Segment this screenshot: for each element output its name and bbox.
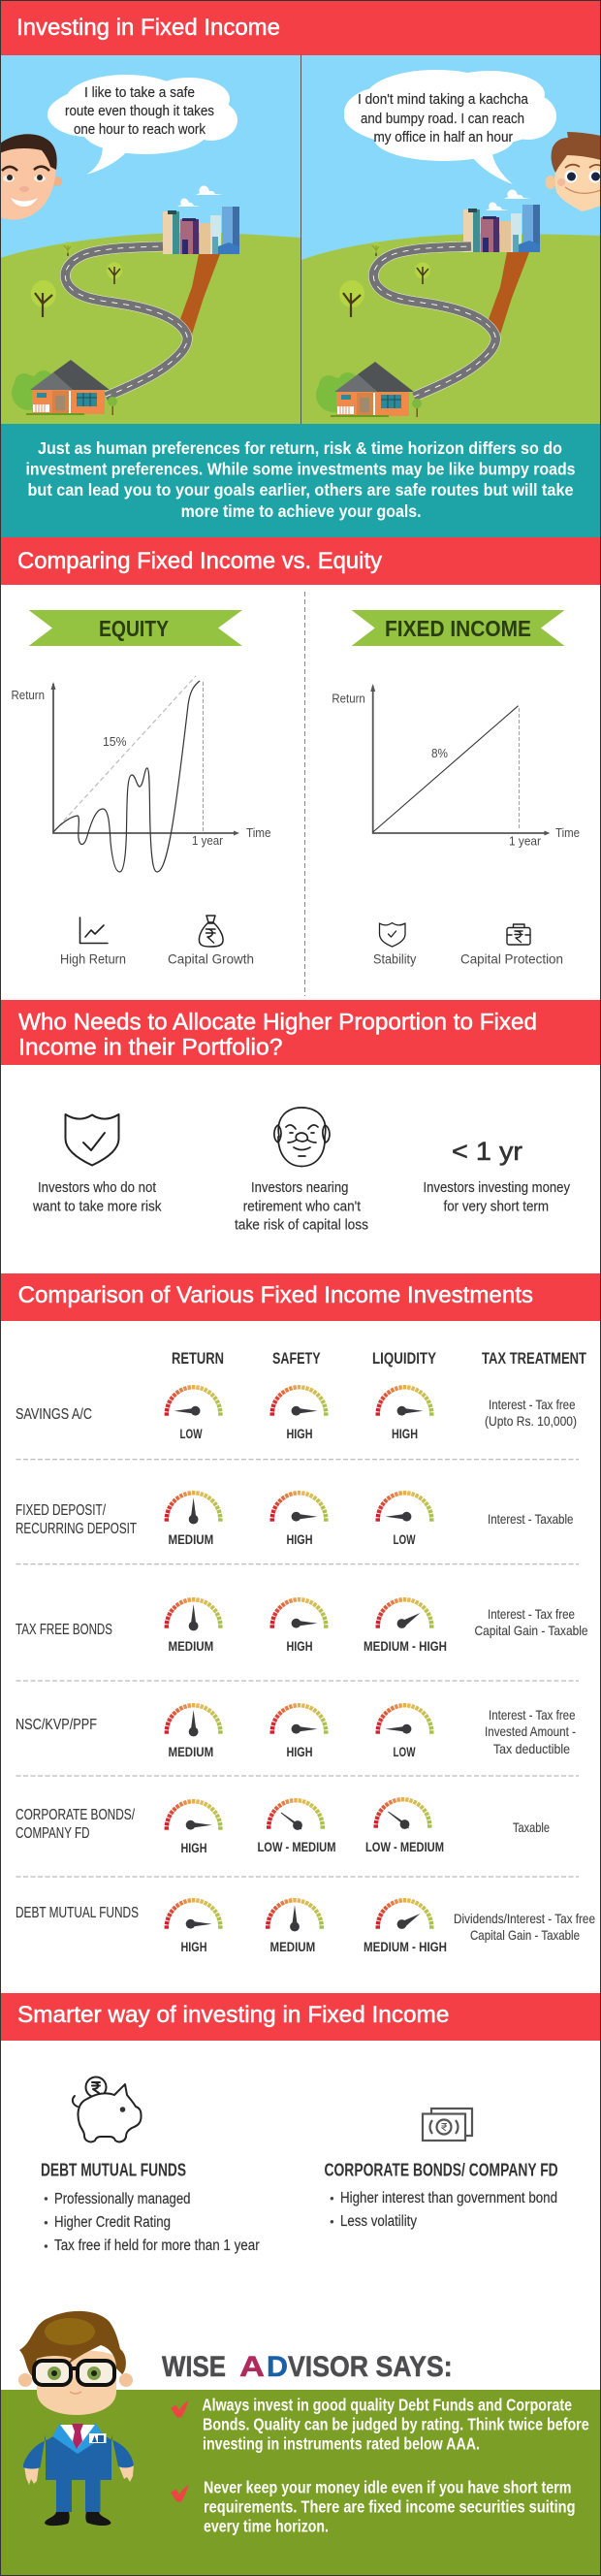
line chart: fixed income returns: 8% [431, 746, 448, 760]
panel: bumpy route scene [301, 55, 601, 424]
row: fixed deposit: Interest - Taxable [488, 1511, 574, 1527]
heading: Who Needs to Allocate: Who Needs to Allocate Higher Proportion to Fixed [18, 1009, 537, 1035]
row: nsc/kvp/ppf: Invested Amount - [485, 1723, 576, 1739]
row: fixed deposit: RECURRING DEPOSIT [16, 1521, 137, 1537]
panel: debt mutual funds: DEBT MUTUAL FUNDS [41, 2160, 186, 2179]
heading: wise advisor says [162, 2351, 453, 2383]
road [65, 246, 187, 397]
heading: Comparing Fixed Income vs. Equity: Comparing Fixed Income vs. Equity [17, 548, 382, 574]
panel: corporate bonds: Less volatility [340, 2213, 417, 2230]
speech bubble: one hour to reach work [74, 122, 206, 138]
row: savings a/c: LOW [180, 1427, 203, 1441]
text: investors nearing retirement: take risk of capital loss [235, 1217, 368, 1234]
row: nsc/kvp/ppf: Interest - Tax free [489, 1707, 576, 1723]
row: debt mutual funds: Capital Gain - Taxable [470, 1927, 580, 1943]
speech bubble: my office in half an hour [374, 130, 513, 145]
text: investors no risk [32, 1179, 162, 1214]
row: savings a/c: Interest - Tax free [489, 1397, 576, 1412]
speech bubble: route even though it takes [65, 104, 214, 119]
label: capital protection: Capital Protection [460, 951, 563, 967]
row: corporate bonds: Taxable [513, 1819, 550, 1835]
panel: fixed income [332, 610, 580, 967]
line chart: equity returns [12, 676, 271, 872]
text: investors no risk: Investors who do not [38, 1179, 157, 1196]
row: fixed deposit: HIGH [287, 1532, 312, 1547]
heading: wise advisor says: D [267, 2351, 288, 2383]
teal statement band: Just as human preferences for return, risk & time horizon differs so do [38, 438, 562, 458]
row: tax free bonds: MEDIUM [169, 1639, 213, 1654]
panel: equity [12, 610, 271, 967]
speech bubble [47, 75, 237, 175]
row: corporate bonds: COMPANY FD [16, 1825, 89, 1842]
panel: debt mutual funds: Higher Credit Rating [54, 2214, 171, 2231]
line chart: equity returns: 1 year [192, 833, 224, 848]
text: investors nearing retirement: retirement who can't [243, 1198, 362, 1214]
panel: corporate bonds [324, 2160, 558, 2230]
text: investors nearing retirement: Investors nearing [251, 1179, 348, 1196]
banner: fixed income [352, 610, 564, 646]
row: nsc/kvp/ppf: LOW [394, 1745, 416, 1759]
teal statement band: more time to achieve your goals. [181, 501, 422, 521]
icon: young man's face [545, 132, 601, 211]
row: tax free bonds: MEDIUM - HIGH [364, 1639, 447, 1654]
tip 2: every time horizon. [204, 2517, 329, 2536]
banner: equity: EQUITY [99, 616, 169, 641]
text: investors short term [423, 1179, 570, 1214]
section: wise advisor says [0, 2311, 601, 2576]
row: fixed deposit [16, 1491, 574, 1547]
kachcha path [489, 252, 529, 338]
speech bubble: I like to take a safe [84, 85, 195, 101]
teal statement band: but can lead you to your goals earlier, others are safe routes but will take [27, 480, 574, 499]
row: nsc/kvp/ppf: HIGH [287, 1745, 312, 1759]
row: corporate bonds: HIGH [180, 1841, 207, 1855]
heading: Investing in Fixed Income: Investing in Fixed Income [16, 15, 280, 41]
section: smarter way [0, 1993, 601, 2254]
icon: high return [79, 918, 108, 943]
heading: Who Needs to Allocate: Income in their Portfolio? [18, 1034, 282, 1060]
icon: advisor character [18, 2311, 134, 2526]
row: tax free bonds: Interest - Tax free [488, 1606, 575, 1622]
row: debt mutual funds: MEDIUM - HIGH [364, 1940, 447, 1954]
label: stability: Stability [373, 951, 416, 967]
text: investors short term: Investors investing money [423, 1179, 570, 1196]
row: fixed deposit: FIXED DEPOSIT/ [16, 1502, 107, 1519]
line chart: equity returns: Time [246, 825, 271, 840]
heading: Comparison of Various Fixed Income Investments: Comparison of Various Fixed Income Investments [18, 1282, 533, 1308]
kachcha path [180, 254, 220, 338]
row: debt mutual funds: MEDIUM [269, 1940, 315, 1954]
line chart: fixed income returns [332, 684, 580, 849]
icon: capital protection briefcase [507, 924, 530, 945]
icon: shield with check [66, 1114, 118, 1166]
road [373, 246, 495, 397]
speech bubble [344, 70, 556, 184]
icon: small clouds [486, 190, 531, 210]
line chart: fixed income returns: Time [555, 825, 580, 840]
banner: fixed income: FIXED INCOME [385, 616, 531, 641]
table header: RETURN [172, 1350, 224, 1368]
line chart: fixed income returns: 1 year [509, 834, 542, 849]
heading: wise advisor says: WISE [162, 2351, 226, 2383]
panel: debt mutual funds: Professionally managed [54, 2191, 190, 2207]
trees [339, 242, 430, 317]
icon: house [12, 360, 117, 415]
heading: Comparing Fixed Income vs. Equity [0, 537, 601, 585]
label: capital growth: Capital Growth [168, 951, 254, 967]
icon: piggy bank [73, 2077, 142, 2141]
banner: equity [29, 610, 242, 646]
heading: Investing in Fixed Income [0, 0, 601, 55]
heading: Who Needs to Allocate [0, 1000, 601, 1065]
row: nsc/kvp/ppf: Tax deductible [493, 1741, 570, 1756]
heading: Smarter way of investing in Fixed Income [0, 1993, 601, 2041]
row: savings a/c: SAVINGS A/C [16, 1406, 92, 1423]
row: savings a/c: HIGH [392, 1427, 418, 1441]
icon: stability shield [380, 923, 405, 947]
teal statement band [0, 424, 601, 537]
section: comparing fixed income vs equity [0, 537, 601, 996]
row: corporate bonds [16, 1797, 550, 1855]
icon: city buildings [463, 205, 540, 252]
table header: SAFETY [272, 1350, 321, 1368]
tip 1 [171, 2396, 589, 2454]
row: debt mutual funds: HIGH [180, 1940, 207, 1954]
panel: corporate bonds: Higher interest than government bond [340, 2190, 557, 2206]
green band [0, 2390, 601, 2576]
heading: Smarter way of investing in Fixed Income: Smarter way of investing in Fixed Income [17, 2002, 449, 2028]
line chart: fixed income returns: Return [332, 692, 365, 706]
row: savings a/c: HIGH [287, 1427, 312, 1441]
speech bubble: I don't mind taking a kachcha [358, 92, 529, 108]
heading: wise advisor says: A [239, 2351, 265, 2383]
section: who needs fixed income [0, 1000, 601, 1234]
tip 2 [171, 2478, 576, 2536]
line chart: equity returns: Return [12, 688, 45, 702]
row: fixed deposit: MEDIUM [169, 1532, 213, 1547]
heading: wise advisor says: VISOR SAYS: [288, 2351, 453, 2383]
heading: Comparison of Various Fixed Income Investments [0, 1273, 601, 1321]
icon: red check [171, 2400, 188, 2417]
row: debt mutual funds: DEBT MUTUAL FUNDS [16, 1905, 139, 1921]
line chart: equity returns: 15% [103, 734, 127, 749]
panel: debt mutual funds [41, 2160, 260, 2254]
text: less than 1 yr: < 1 yr [452, 1137, 522, 1166]
tip 1: investing in instruments rated below AAA. [203, 2434, 480, 2454]
row: corporate bonds: CORPORATE BONDS/ [16, 1807, 136, 1823]
table header [172, 1350, 586, 1368]
icon: old man face [274, 1108, 330, 1166]
section: investing scenario [0, 0, 601, 537]
icon: money bag [199, 916, 223, 947]
icon: house [316, 362, 422, 417]
icon: small clouds [177, 186, 223, 207]
icon: city buildings [163, 207, 239, 254]
label: high return: High Return [60, 951, 126, 967]
divider [300, 55, 301, 424]
row: corporate bonds: LOW - MEDIUM [365, 1840, 444, 1854]
panel: safe route scene [0, 55, 300, 424]
table header: LIQUIDITY [372, 1350, 436, 1368]
row: savings a/c: (Upto Rs. 10,000) [485, 1413, 577, 1429]
row: fixed deposit: LOW [394, 1532, 416, 1547]
section: comparison table [0, 1273, 601, 1954]
row: savings a/c [16, 1385, 577, 1441]
row: nsc/kvp/ppf: MEDIUM [169, 1745, 213, 1759]
row: tax free bonds: TAX FREE BONDS [16, 1622, 112, 1638]
icon: red check [171, 2485, 188, 2502]
row: corporate bonds: LOW - MEDIUM [258, 1840, 335, 1854]
row: nsc/kvp/ppf: NSC/KVP/PPF [16, 1717, 97, 1733]
text: investors nearing retirement [235, 1179, 368, 1234]
row: tax free bonds [16, 1597, 588, 1654]
row: debt mutual funds [16, 1898, 595, 1954]
row: nsc/kvp/ppf [16, 1703, 576, 1759]
text: investors short term: for very short term [444, 1198, 549, 1214]
speech bubble: and bumpy road. I can reach [361, 112, 524, 127]
text: investors no risk: want to take more risk [32, 1198, 162, 1214]
row: tax free bonds: HIGH [287, 1639, 312, 1654]
icon: man's face [0, 134, 62, 220]
panel: debt mutual funds: Tax free if held for more than 1 year [54, 2238, 260, 2254]
icon: banknotes [423, 2109, 472, 2141]
trees [31, 242, 122, 317]
